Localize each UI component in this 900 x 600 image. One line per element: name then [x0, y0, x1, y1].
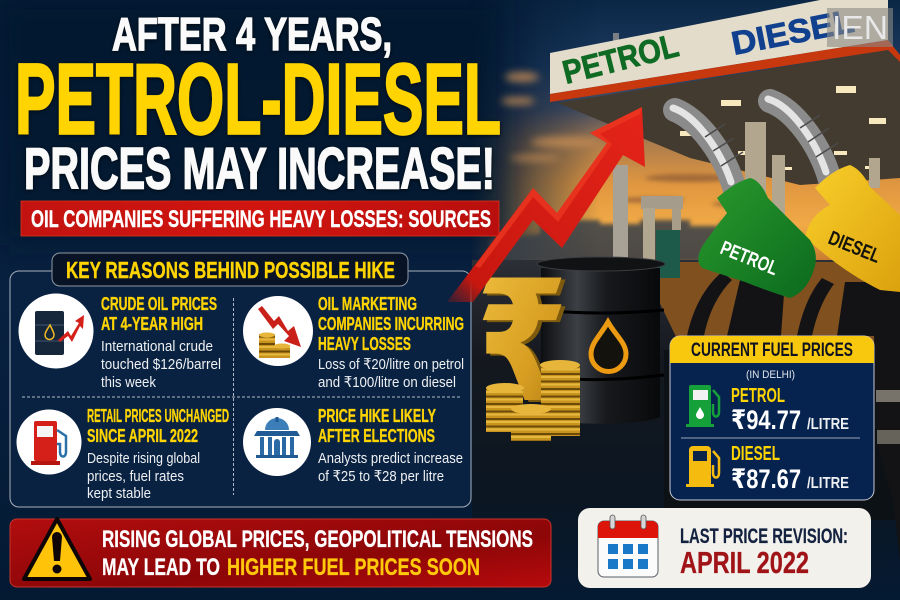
reason 4: price hike after elections: Analysts predict increase [318, 450, 463, 467]
reason 4: price hike after elections [243, 405, 463, 485]
watermark: IEN [832, 9, 888, 46]
reason 4: price hike after elections: PRICE HIKE LIKELY [318, 405, 436, 426]
reason 1: crude oil: touched $126/barrel [101, 356, 221, 373]
distant pump [613, 33, 683, 278]
diesel price row: DIESEL [731, 443, 780, 465]
reason 2: oil marketing companies [243, 293, 464, 391]
skyline [490, 220, 780, 262]
warning text line 2: MAY LEAD TO [102, 554, 220, 581]
barrel oil drop [591, 322, 626, 372]
diesel price row [686, 443, 849, 494]
price panel location: (IN DELHI) [746, 369, 795, 381]
panel: key reasons [10, 253, 471, 507]
subtitle banner: OIL COMPANIES SUFFERING HEAVY LOSSES: SOURCES [31, 206, 491, 233]
gold coin stacks [486, 360, 580, 441]
reason 4: price hike after elections: of ₹25 to ₹28 per litre [318, 468, 444, 485]
icon: warning triangle [24, 519, 90, 579]
petrol price row: ₹94.77 [731, 405, 801, 435]
warning text: RISING GLOBAL PRICES, GEOPOLITICAL TENSIONS [102, 526, 533, 553]
price panel header [670, 336, 874, 363]
canopy underside [558, 50, 900, 185]
icon: oil barrel with rising arrow [18, 294, 94, 368]
diesel price row: /LITRE [807, 475, 849, 492]
reason 1: crude oil: this week [101, 374, 156, 391]
panel: last price revision [578, 508, 871, 588]
reason 3: retail prices unchanged: RETAIL PRICES UNCHANGED [87, 405, 229, 426]
sign text: diesel: DIESEL [728, 2, 857, 62]
sign text: petrol: PETROL [559, 26, 682, 91]
reason 4: price hike after elections: AFTER ELECTIONS [318, 425, 435, 446]
reason 3: retail prices unchanged: Despite rising global [87, 450, 200, 467]
nozzle label: petrol: PETROL [717, 237, 781, 280]
reason 3: retail prices unchanged: kept stable [87, 485, 151, 502]
warning banner [10, 519, 551, 587]
warning text line 2 [102, 554, 480, 581]
subtitle banner [21, 201, 499, 236]
icon: green pump [686, 385, 719, 427]
ground [472, 260, 900, 600]
rising red arrow [447, 107, 645, 302]
reason 2: oil marketing companies: OIL MARKETING [318, 293, 417, 314]
reason 2: oil marketing companies: Loss of ₹20/litre on petrol [318, 356, 464, 373]
diesel price row: ₹87.67 [731, 464, 801, 494]
reason 2: oil marketing companies: COMPANIES INCURRING [318, 313, 464, 334]
nozzle label: diesel: DIESEL [825, 227, 883, 268]
petrol price row [686, 385, 849, 435]
panel: last price revision: APRIL 2022 [680, 545, 809, 580]
reason 1: crude oil: AT 4-YEAR HIGH [101, 313, 203, 334]
icon: red fuel pump [16, 410, 82, 474]
rupee symbol: ₹ [476, 248, 568, 436]
icon: yellow pump [686, 446, 719, 487]
diesel nozzle [768, 99, 900, 292]
canopy pillars [745, 122, 880, 215]
reason 2: oil marketing companies: and ₹100/litre on diesel [318, 374, 456, 391]
icon: government building [243, 408, 311, 476]
warning text line 2: HIGHER FUEL PRICES SOON [227, 554, 480, 581]
oil barrel [537, 257, 665, 424]
canopy lights [680, 86, 886, 170]
petrol price row: PETROL [731, 385, 785, 407]
panel heading: KEY REASONS BEHIND POSSIBLE HIKE [66, 257, 395, 283]
canopy sign band [550, 0, 888, 94]
reason 3: retail prices unchanged [16, 405, 229, 502]
reason 1: crude oil [18, 293, 221, 391]
petrol price row: /LITRE [807, 416, 849, 433]
title [15, 8, 501, 202]
panel: current fuel prices [670, 336, 874, 500]
panel heading [52, 253, 408, 286]
canopy red stripe [550, 40, 900, 102]
reason 3: retail prices unchanged: SINCE APRIL 2022 [87, 425, 198, 446]
petrol nozzle [673, 108, 816, 298]
title line 1: AFTER 4 YEARS, [112, 8, 392, 60]
reason 1: crude oil: International crude [101, 338, 213, 355]
icon: calendar [598, 515, 658, 577]
reason 1: crude oil: CRUDE OIL PRICES [101, 293, 217, 314]
title line 3: PRICES MAY INCREASE! [24, 136, 495, 202]
reason 3: retail prices unchanged: prices, fuel rates [87, 468, 184, 485]
reason 2: oil marketing companies: HEAVY LOSSES [318, 333, 411, 354]
title line 2: PETROL-DIESEL [15, 44, 501, 156]
nozzle handles and hoses [687, 272, 900, 560]
icon: falling arrow and coins [243, 296, 313, 366]
